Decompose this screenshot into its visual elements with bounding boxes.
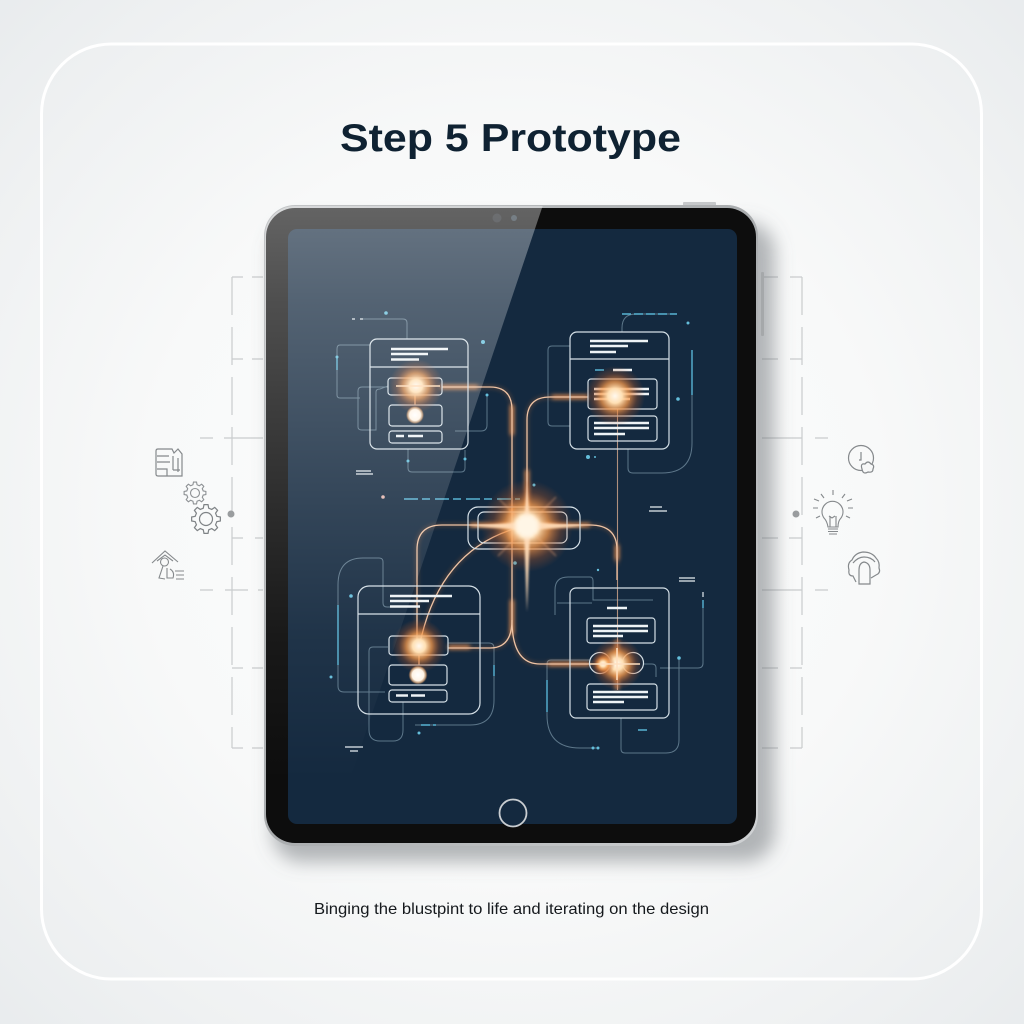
star burst: central hub xyxy=(468,480,586,612)
tablet shadow xyxy=(272,222,775,862)
tablet side button xyxy=(761,272,764,336)
glow node: bottom left card xyxy=(392,619,446,673)
camera lens xyxy=(492,214,502,222)
faint line halo xyxy=(417,387,617,664)
screen glass reflection xyxy=(265,206,542,679)
small note marks xyxy=(345,319,703,751)
glow node: top left card xyxy=(389,359,443,413)
glow ball: bottom left card xyxy=(408,666,428,684)
wireframe diagram xyxy=(330,311,703,753)
icon: clock with cloud xyxy=(848,446,874,473)
central hub node xyxy=(468,507,580,549)
home button xyxy=(500,800,526,826)
localized line glow xyxy=(440,387,617,690)
tablet silver frame xyxy=(264,205,758,846)
icon: large gear xyxy=(192,505,220,533)
wireframe card: bottom left xyxy=(358,586,480,714)
glow node: bottom right card xyxy=(590,638,643,690)
tablet screen xyxy=(288,229,737,824)
icon: head with gear xyxy=(848,552,880,584)
icon: light bulb xyxy=(813,490,853,534)
cyan accent dots xyxy=(330,311,690,750)
left connector dot xyxy=(228,510,234,518)
icon: house with tools xyxy=(152,551,184,579)
wireframe card: top right xyxy=(570,332,669,449)
left blueprint dashes xyxy=(200,277,263,748)
tablet top button xyxy=(683,202,716,207)
title: Step 5 Prototype xyxy=(340,117,681,160)
wireframe card: bottom right xyxy=(570,588,669,718)
bright line cores xyxy=(415,387,617,665)
right connector dot xyxy=(792,510,800,518)
tablet device xyxy=(264,205,758,846)
icon: small gear xyxy=(184,482,206,504)
camera sensor xyxy=(511,215,517,221)
right blueprint dashes xyxy=(762,277,828,748)
icon: blueprint document xyxy=(156,449,182,476)
glow node: top right card xyxy=(585,366,645,426)
cyan accent dashes xyxy=(337,314,703,730)
wireframe card: top left xyxy=(370,339,468,449)
subtitle: Binging the blustpint to life and iterating on the design xyxy=(314,901,709,918)
pale vertical line xyxy=(616,409,618,690)
tablet black bezel xyxy=(266,208,756,843)
glow ball: top left card xyxy=(406,406,424,424)
thin connector lines xyxy=(337,314,703,753)
